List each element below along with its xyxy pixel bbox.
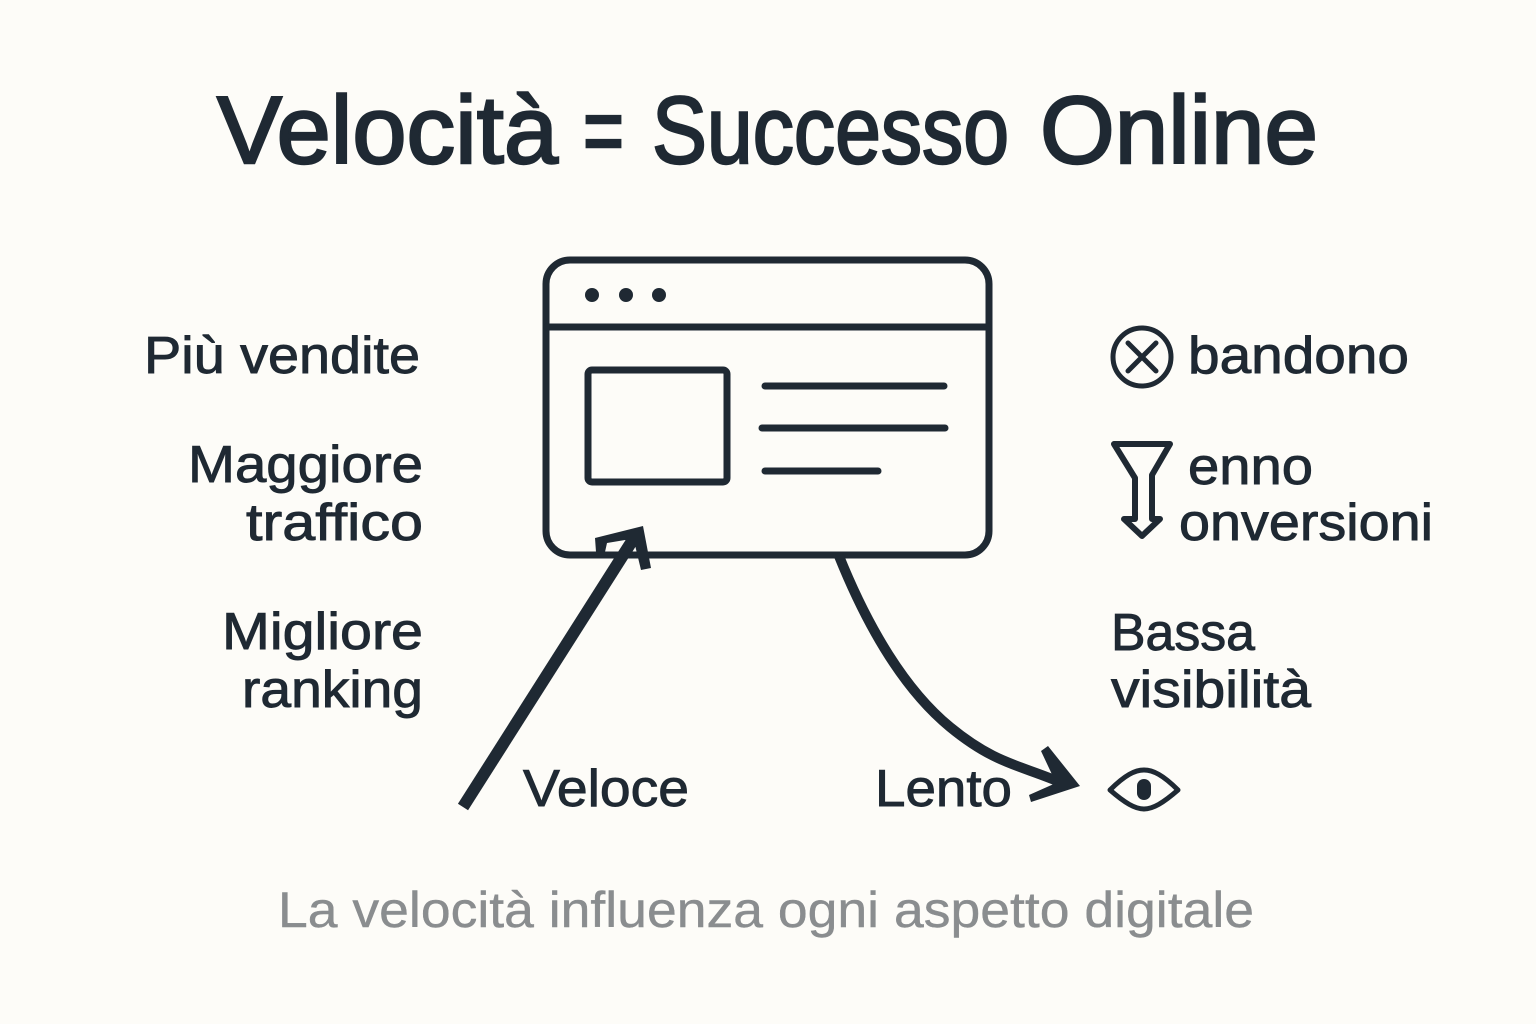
- label: Veloce: Veloce: [523, 760, 689, 818]
- icon: eye: [1110, 770, 1178, 809]
- arrow: slow: [839, 556, 1080, 802]
- left benefits: [144, 327, 423, 719]
- title: Online: [1040, 77, 1318, 184]
- icon: funnel down arrow: [1114, 444, 1170, 536]
- left benefits: ranking: [242, 661, 423, 719]
- left benefits: traffico: [246, 494, 423, 552]
- label: low visibility: visibilità: [1111, 661, 1311, 719]
- label: abandon: bandono: [1188, 327, 1409, 385]
- left benefits: Maggiore: [188, 436, 423, 494]
- arrow: fast: [463, 526, 651, 807]
- caption: La velocità influenza ogni aspetto digitale: [278, 882, 1254, 938]
- title: Successo: [652, 77, 1009, 184]
- label: conversions: onversioni: [1179, 494, 1433, 552]
- label: low visibility: Bassa: [1111, 604, 1255, 662]
- icon: browser window: [546, 260, 989, 555]
- left benefits: Più vendite: [144, 327, 420, 385]
- left benefits: Migliore: [222, 603, 423, 661]
- icon: abandon X: [1113, 328, 1171, 386]
- label: conversions: [1179, 438, 1433, 552]
- label: conversions: enno: [1188, 438, 1313, 496]
- title: Velocità: [217, 77, 559, 184]
- title: =: [583, 77, 624, 184]
- label: Lento: Lento: [875, 760, 1012, 818]
- label: low visibility: [1111, 604, 1311, 719]
- title: [217, 77, 1318, 184]
